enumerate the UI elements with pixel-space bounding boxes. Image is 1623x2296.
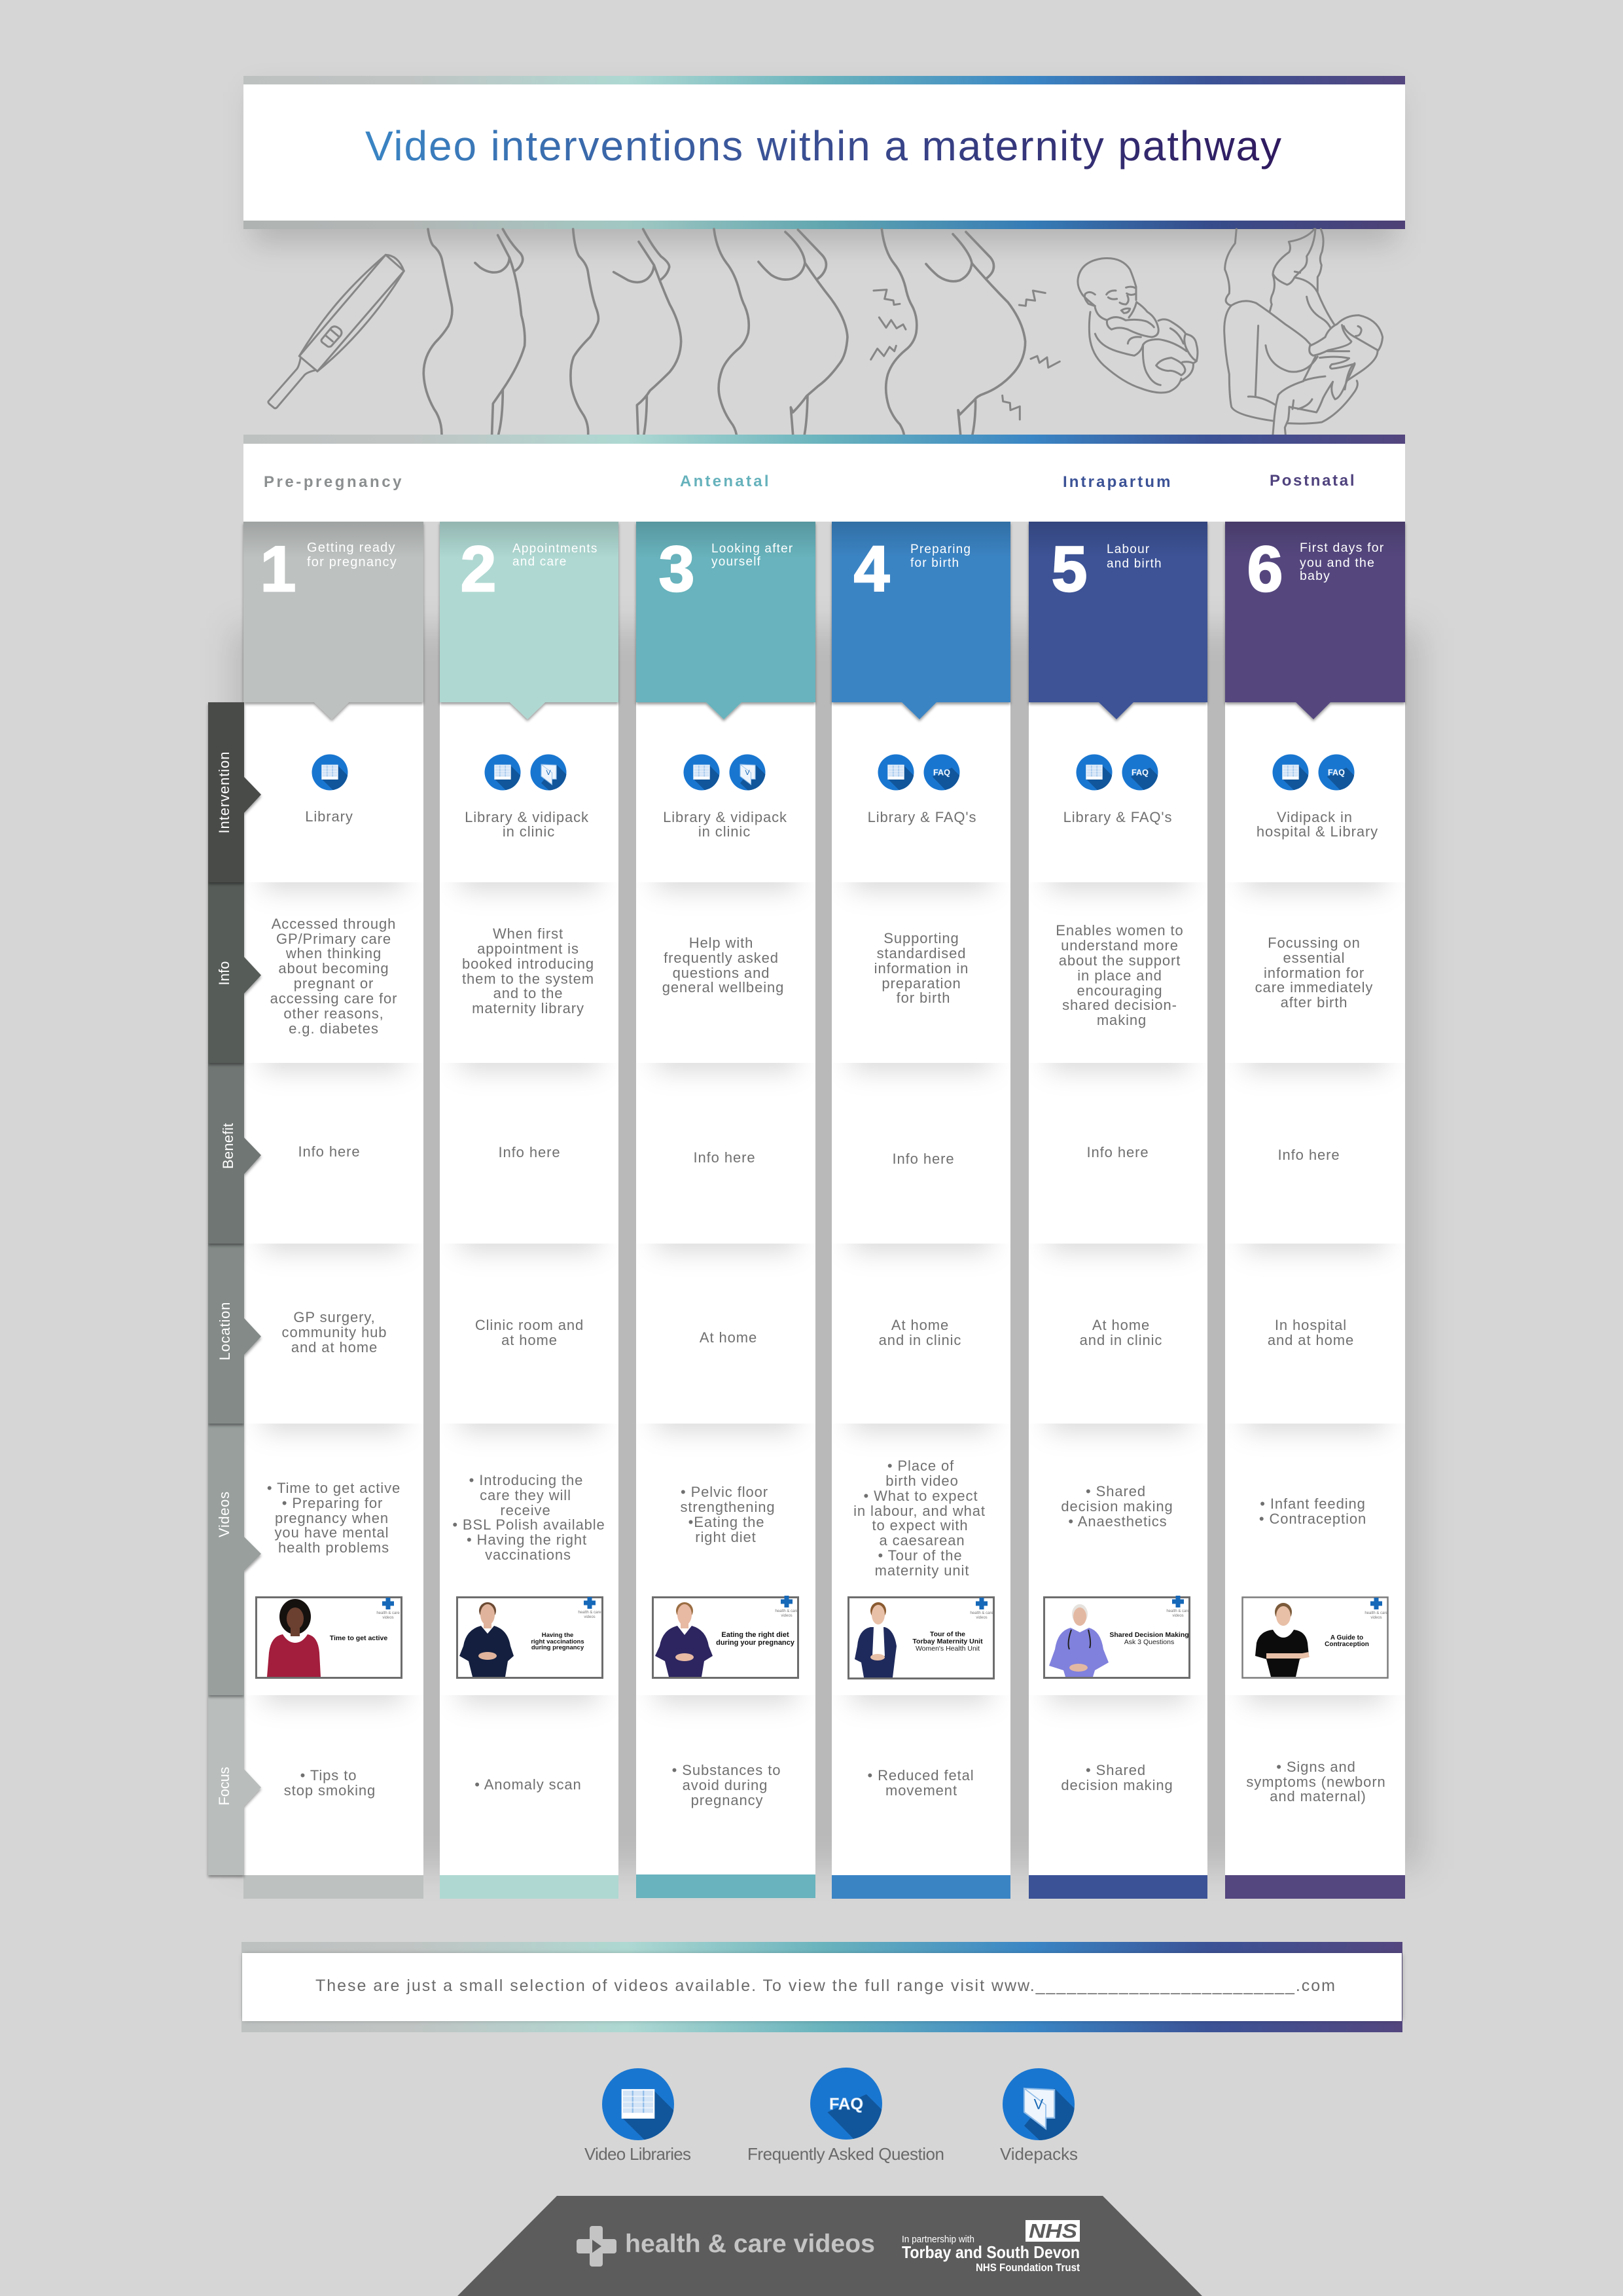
intervention text, column 5: Library & FAQ's: [1063, 809, 1172, 825]
videos list, column 3: •Eating the: [688, 1514, 764, 1530]
videos list, column 2: • Introducing the: [469, 1472, 583, 1488]
row tab: Intervention: [208, 702, 261, 882]
info text, column 1: accessing care for: [270, 990, 397, 1007]
video thumbnail, column 3: videos: [781, 1614, 793, 1618]
legend: videpacks: Videpacks: [1000, 2144, 1078, 2164]
info text, column 5: Enables women to: [1056, 922, 1184, 939]
row tab: Location: [208, 1244, 261, 1424]
location text, column 1: community hub: [282, 1324, 387, 1340]
panel: stage 6 header: [1225, 522, 1405, 719]
intervention icons, column 4: FAQ: [933, 768, 950, 777]
video thumbnail, column 5: health & care: [1166, 1609, 1190, 1613]
videos list, column 2: • BSL Polish available: [452, 1516, 605, 1533]
video thumbnail, column 4: health & care: [970, 1611, 993, 1615]
video thumbnail, column 2: during pregnancy: [531, 1644, 584, 1651]
info text, column 6: care immediately: [1255, 979, 1373, 996]
intervention icons, column 5: [1076, 754, 1179, 810]
legend: video libraries: Video Libraries: [584, 2144, 691, 2164]
video thumbnail, column 5: videos: [1172, 1614, 1184, 1618]
video thumbnail, column 5: Ask 3 Questions: [1124, 1638, 1174, 1646]
info text, column 2: booked introducing: [462, 956, 594, 972]
info text, column 5: making: [1097, 1012, 1147, 1028]
location text, column 3: At home: [700, 1329, 757, 1346]
benefit text, column 6: Info here: [1278, 1147, 1340, 1163]
videos list, column 6: • Contraception: [1259, 1511, 1366, 1527]
benefit text, column 4: Info here: [893, 1151, 954, 1167]
info text, column 4: information in: [874, 960, 969, 977]
focus text, column 6: symptoms (newborn: [1246, 1774, 1386, 1790]
video thumbnail, column 6: health & care: [1364, 1611, 1388, 1615]
videos list, column 3: right diet: [695, 1529, 757, 1545]
videos list, column 4: maternity unit: [875, 1562, 969, 1579]
intervention text, column 4: Library & FAQ's: [868, 809, 976, 825]
videos list, column 2: receive: [500, 1502, 551, 1518]
info text, column 5: shared decision-: [1062, 997, 1177, 1013]
benefit text, column 5: Info here: [1087, 1144, 1149, 1160]
videos list, column 2: care they will: [480, 1487, 571, 1503]
heading: Pre-pregnancy: Pre-pregnancy: [264, 473, 402, 491]
stage 1 title: for pregnancy: [307, 555, 397, 569]
location text, column 6: and at home: [1268, 1332, 1354, 1348]
stage 2 title: Appointments: [512, 542, 598, 556]
video thumbnail, column 3: during your pregnancy: [716, 1639, 795, 1647]
stage 6 title: baby: [1300, 569, 1330, 583]
location text, column 1: and at home: [291, 1339, 378, 1355]
focus text, column 5: decision making: [1061, 1777, 1173, 1793]
icon: pregnancy test: [268, 255, 404, 408]
video thumbnail, column 4: Torbay Maternity Unit: [912, 1638, 983, 1645]
info text, column 2: When first: [493, 925, 563, 942]
video thumbnail, column 6: A Guide to: [1330, 1634, 1363, 1641]
info text, column 1: other reasons,: [283, 1005, 384, 1022]
row tab: Focus: Focus: [216, 1767, 232, 1805]
benefit text, column 3: Info here: [694, 1149, 755, 1166]
video thumbnail, column 2: right vaccinations: [531, 1638, 584, 1645]
info text, column 6: Focussing on: [1268, 935, 1361, 951]
stage 5 title: Labour: [1107, 543, 1150, 556]
row tab: Videos: [208, 1424, 261, 1695]
info text, column 6: information for: [1264, 965, 1364, 981]
video thumbnail, column 2: Having the: [542, 1632, 573, 1639]
intervention icons, column 2: V: [546, 769, 551, 777]
videos list, column 2: vaccinations: [485, 1547, 571, 1563]
row tab: Benefit: [208, 1063, 261, 1244]
intervention icons, column 2: [484, 754, 584, 810]
video thumbnail, column 2: videos: [584, 1615, 596, 1619]
intervention text, column 3: in clinic: [698, 823, 751, 840]
info text, column 2: them to the system: [462, 971, 594, 987]
icon: newborn baby: [1078, 259, 1198, 393]
stage 1 title: Getting ready: [307, 541, 396, 555]
videos list, column 2: • Having the right: [467, 1532, 587, 1548]
video thumbnail, column 5: Shared Decision Making: [1109, 1631, 1189, 1639]
focus text, column 1: stop smoking: [284, 1782, 376, 1799]
videos list, column 3: • Pelvic floor: [681, 1484, 768, 1500]
stage 6 title: First days for: [1300, 541, 1385, 555]
video thumbnail, column 5: [1044, 1596, 1190, 1678]
video thumbnail, column 1: videos: [382, 1616, 394, 1620]
legend: videpacks: V: [1034, 2096, 1044, 2113]
panel: stage 3 header: [636, 522, 815, 719]
info text, column 5: understand more: [1061, 937, 1179, 954]
focus text, column 4: • Reduced fetal: [867, 1767, 974, 1784]
row tab: Videos: Videos: [216, 1492, 232, 1537]
videos list, column 4: in labour, and what: [853, 1503, 986, 1519]
icon: body in labour with contraction marks: [871, 229, 1060, 435]
row tab: Info: [208, 882, 261, 1063]
logo: health & care videos: [577, 2226, 875, 2267]
stage 4 title: for birth: [910, 556, 959, 570]
stage 2 title: and care: [512, 555, 567, 569]
videos list, column 5: • Anaesthetics: [1068, 1513, 1168, 1530]
info text, column 4: standardised: [877, 945, 966, 961]
focus text, column 3: avoid during: [683, 1777, 768, 1793]
icon: body early pregnancy: [423, 229, 525, 435]
icon: body mid pregnancy: [571, 229, 681, 435]
intervention icons, column 4: [878, 754, 982, 810]
info text, column 2: appointment is: [477, 941, 579, 957]
videos list, column 3: strengthening: [680, 1499, 776, 1515]
focus text, column 1: • Tips to: [300, 1767, 357, 1784]
video thumbnail, column 6: Contraception: [1325, 1641, 1369, 1648]
row tab: Benefit: Benefit: [220, 1123, 236, 1169]
focus text, column 2: • Anomaly scan: [474, 1776, 582, 1793]
videos list, column 5: • Shared: [1086, 1483, 1146, 1499]
stage 3 title: Looking after: [711, 542, 793, 556]
video thumbnail, column 4: Tour of the: [930, 1630, 965, 1638]
heading: Intrapartum: Intrapartum: [1063, 473, 1171, 491]
title: Video interventions within a maternity pathway: [365, 122, 1281, 170]
video thumbnail, column 1: [257, 1597, 402, 1678]
intervention text, column 2: Library & vidipack: [465, 809, 589, 825]
info text, column 3: general wellbeing: [662, 979, 784, 996]
number 1: 1: [260, 533, 296, 605]
video thumbnail, column 4: [848, 1597, 993, 1678]
row tab: Info: Info: [216, 961, 232, 986]
info text, column 1: e.g. diabetes: [289, 1020, 379, 1037]
info text, column 1: Accessed through: [272, 916, 396, 932]
legend: frequently asked question: [747, 2068, 944, 2179]
logo: health & care videos: health & care videos: [625, 2230, 875, 2258]
videos list, column 4: • Place of: [887, 1458, 954, 1474]
footer colour bars of columns: [243, 1874, 1405, 1899]
panel: column 6 white card: [1225, 702, 1405, 1875]
number 5: 5: [1052, 533, 1087, 605]
panel: stage 1 header: [243, 522, 423, 719]
info text, column 1: GP/Primary care: [276, 931, 391, 947]
video thumbnail, column 4: videos: [976, 1616, 988, 1620]
callout: website banner: [241, 1942, 1402, 2032]
panel: column 1 white card: [243, 702, 423, 1875]
heading: Antenatal: Antenatal: [680, 473, 770, 490]
info text, column 3: Help with: [689, 935, 753, 951]
location text, column 5: At home: [1092, 1317, 1150, 1333]
focus text, column 6: • Signs and: [1276, 1759, 1356, 1775]
location text, column 5: and in clinic: [1080, 1332, 1162, 1348]
illustration: pregnancy journey line art: [268, 229, 1383, 435]
location text, column 6: In hospital: [1275, 1317, 1347, 1333]
video thumbnail, column 1: Time to get active: [330, 1634, 387, 1642]
intervention text, column 3: Library & vidipack: [663, 809, 787, 825]
info text, column 2: and to the: [493, 985, 563, 1001]
number 4: 4: [854, 533, 889, 605]
videos list, column 1: • Time to get active: [267, 1480, 401, 1496]
info text, column 5: about the support: [1059, 952, 1181, 969]
focus text, column 3: pregnancy: [691, 1792, 763, 1808]
videos list, column 4: birth video: [885, 1473, 959, 1489]
focus text, column 6: and maternal): [1270, 1788, 1366, 1804]
panel: column 3 white card: [636, 702, 815, 1875]
location text, column 1: GP surgery,: [293, 1309, 376, 1325]
location text, column 2: at home: [501, 1332, 558, 1348]
benefit text, column 2: Info here: [499, 1144, 560, 1160]
panel: stage 5 header: [1029, 522, 1207, 719]
intervention text, column 6: hospital & Library: [1257, 823, 1378, 840]
logo: Torbay and South Devon NHS: Torbay and South Devon: [902, 2242, 1080, 2262]
location text, column 4: At home: [891, 1317, 949, 1333]
stage 3 title: yourself: [711, 555, 761, 569]
location text, column 4: and in clinic: [879, 1332, 961, 1348]
info text, column 2: maternity library: [472, 1000, 584, 1016]
videos list, column 5: decision making: [1061, 1498, 1173, 1515]
logo: Torbay and South Devon NHS: In partnership with: [902, 2234, 974, 2245]
videos list, column 6: • Infant feeding: [1260, 1496, 1366, 1512]
legend: video libraries: [584, 2068, 710, 2176]
row tab: Intervention: Intervention: [216, 751, 232, 834]
video thumbnail, column 6: [1242, 1597, 1388, 1678]
banner text: These are just a small selection of videos available. To view the full range visit www._________________________.com: [315, 1977, 1335, 1995]
logo: Torbay and South Devon NHS: NHS: [1029, 2219, 1077, 2242]
info text, column 1: about becoming: [278, 960, 389, 977]
logo: Torbay and South Devon NHS: NHS Foundation Trust: [976, 2261, 1080, 2274]
videos list, column 1: pregnancy when: [275, 1510, 389, 1526]
videos list, column 4: to expect with: [872, 1517, 969, 1534]
intervention icons, column 3: [683, 754, 783, 810]
number 2: 2: [461, 533, 496, 605]
panel: stage 2 header: [440, 522, 618, 719]
focus text, column 4: movement: [885, 1782, 957, 1799]
videos list, column 1: you have mental: [275, 1524, 389, 1541]
legend: videpacks: [1000, 2068, 1111, 2179]
info text, column 1: when thinking: [285, 945, 382, 961]
intervention text, column 1: Library: [305, 808, 353, 825]
info text, column 4: Supporting: [883, 930, 959, 946]
intervention icons, column 5: FAQ: [1132, 768, 1149, 777]
video thumbnail, column 3: Eating the right diet: [721, 1631, 789, 1639]
video thumbnail, column 6: videos: [1370, 1616, 1382, 1620]
icon: library, column 1: [312, 754, 366, 808]
intervention icons, column 6: FAQ: [1328, 768, 1345, 777]
video thumbnail, column 2: health & care: [578, 1611, 601, 1615]
videos list, column 1: health problems: [278, 1539, 389, 1556]
info text, column 4: preparation: [882, 975, 961, 992]
stage 5 title: and birth: [1107, 557, 1162, 571]
panel: stage 4 header: [832, 522, 1010, 719]
number 3: 3: [659, 533, 694, 605]
row tab: Focus: [208, 1695, 261, 1875]
logo: Torbay and South Devon NHS: [902, 2219, 1080, 2274]
info text, column 5: encouraging: [1077, 982, 1162, 999]
legend: frequently asked question: Frequently Asked Question: [747, 2144, 944, 2164]
intervention icons, column 3: V: [745, 769, 750, 777]
heading: Postnatal: Postnatal: [1270, 472, 1355, 490]
location text, column 2: Clinic room and: [475, 1317, 584, 1333]
video thumbnail, column 4: Women's Health Unit: [916, 1645, 980, 1653]
benefit text, column 1: Info here: [298, 1143, 360, 1160]
info text, column 6: after birth: [1281, 994, 1347, 1011]
videos list, column 4: • Tour of the: [878, 1547, 963, 1564]
focus text, column 3: • Substances to: [672, 1762, 781, 1778]
info text, column 3: frequently asked: [664, 950, 779, 966]
stage 6 title: you and the: [1300, 556, 1375, 570]
intervention text, column 6: Vidipack in: [1277, 809, 1353, 825]
focus text, column 5: • Shared: [1086, 1762, 1146, 1778]
videos list, column 1: • Preparing for: [282, 1495, 383, 1511]
number 6: 6: [1247, 533, 1283, 605]
row tab: Location: Location: [217, 1302, 233, 1360]
intervention icons, column 6: [1272, 754, 1376, 810]
video thumbnail, column 2: [457, 1597, 602, 1678]
title banner: [243, 76, 1405, 229]
videos list, column 4: • What to expect: [864, 1488, 978, 1504]
panel: column 5 white card: [1029, 702, 1207, 1875]
info text, column 6: essential: [1283, 950, 1345, 966]
panel: pathway stage labels: [243, 435, 1405, 522]
info text, column 1: pregnant or: [294, 975, 374, 992]
info text, column 3: questions and: [673, 965, 770, 981]
stage 4 title: Preparing: [910, 543, 971, 556]
video thumbnail, column 3: health & care: [775, 1609, 798, 1613]
icon: body late pregnancy: [714, 229, 847, 435]
legend: frequently asked question: FAQ: [829, 2095, 863, 2113]
videos list, column 4: a caesarean: [880, 1532, 965, 1549]
footer panel with logos: [457, 2196, 1202, 2296]
info text, column 5: in place and: [1077, 967, 1162, 984]
panel: column 4 white card: [832, 702, 1010, 1875]
info text, column 4: for birth: [897, 990, 950, 1006]
intervention text, column 2: in clinic: [503, 823, 555, 840]
video thumbnail, column 1: health & care: [376, 1611, 400, 1615]
icon: mother holding baby: [1224, 229, 1383, 435]
panel: column 2 white card: [440, 702, 618, 1875]
video thumbnail, column 3: [653, 1596, 798, 1678]
